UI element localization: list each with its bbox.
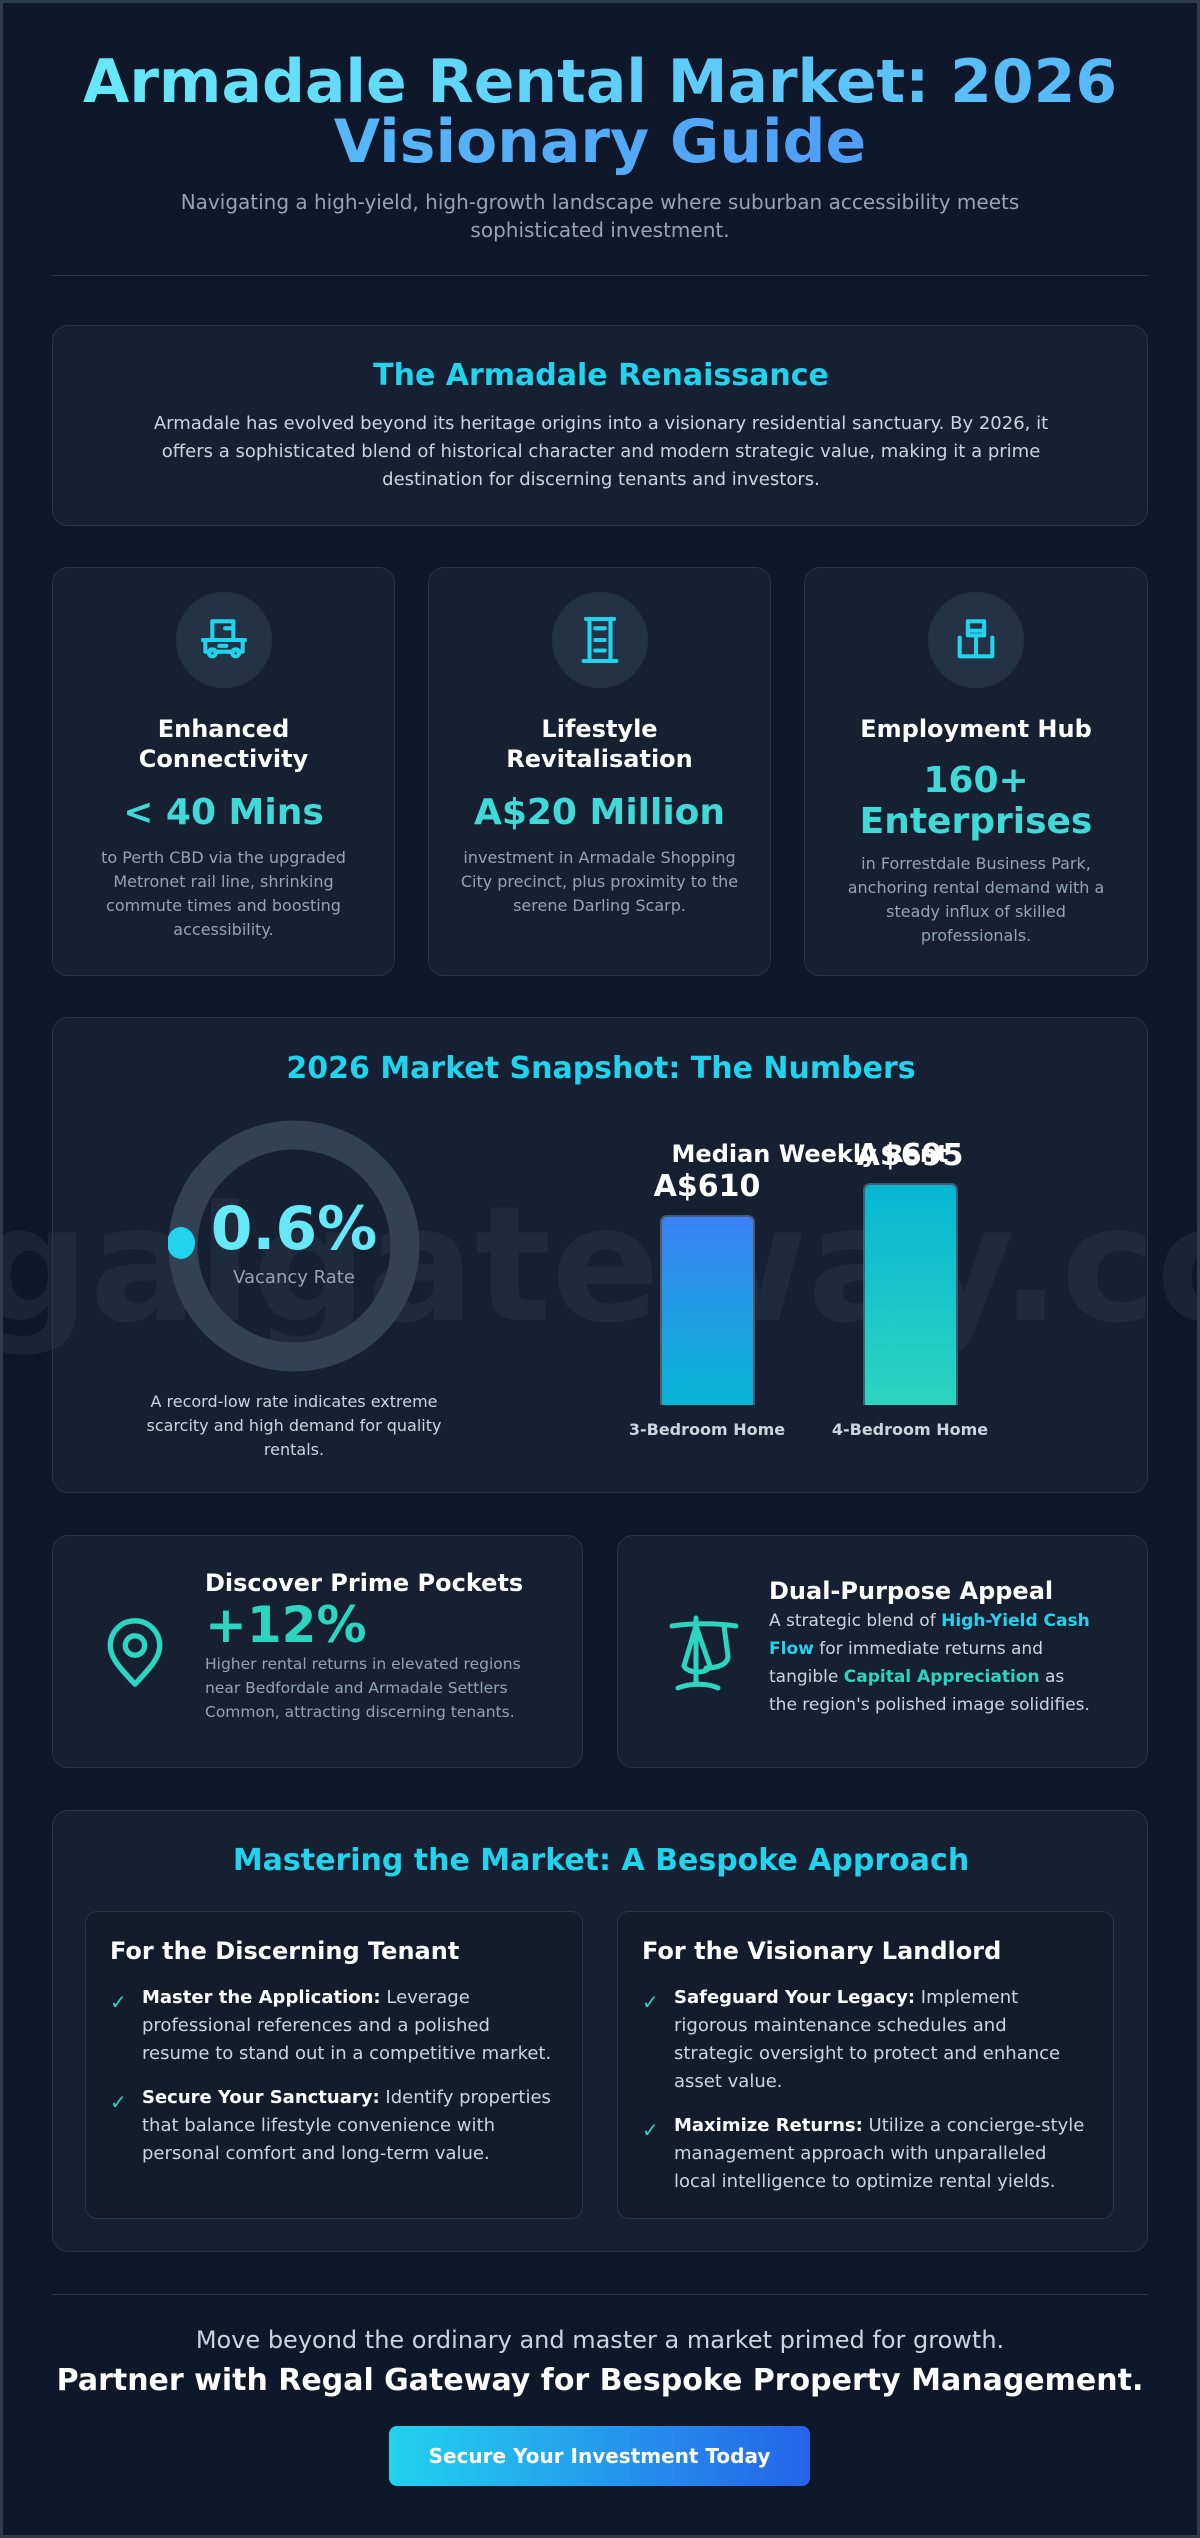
text: prime pockets: Discover Prime Pockets bbox=[205, 1569, 523, 1597]
icon: map pin bbox=[108, 1618, 162, 1687]
item: legacy bbox=[642, 1987, 1060, 2092]
icon: building bbox=[552, 592, 648, 688]
item: sanctuary: that balance lifestyle convenience with bbox=[142, 2115, 495, 2136]
text: prime pockets: Higher rental returns in elevated regions bbox=[205, 1655, 521, 1673]
heading: tenant: For the Discerning Tenant bbox=[110, 1937, 459, 1965]
value: vacancy: 0.6% bbox=[211, 1194, 377, 1264]
text: employment: 160+ bbox=[923, 760, 1029, 801]
donut chart: vacancy bbox=[168, 1120, 420, 1372]
item: returns: local intelligence to optimize rental yields. bbox=[674, 2171, 1055, 2192]
text: dual purpose bbox=[769, 1577, 1090, 1715]
text: prime pockets: near Bedfordale and Armadale Settlers bbox=[205, 1679, 508, 1697]
label: 4-bedroom: 4-Bedroom Home bbox=[832, 1420, 988, 1439]
text: dual purpose: the region's polished image solidifies. bbox=[769, 1695, 1090, 1715]
text: dual purpose: Flow for immediate returns and bbox=[769, 1639, 1043, 1659]
card: dual purpose bbox=[617, 1535, 1148, 1768]
heading: landlord: For the Visionary Landlord bbox=[642, 1937, 1001, 1965]
item: sanctuary: ✓ bbox=[110, 2090, 127, 2114]
item: application: professional references and a polished bbox=[142, 2015, 490, 2036]
item: sanctuary: personal comfort and long-term value. bbox=[142, 2143, 490, 2164]
item: returns: management approach with unparalleled bbox=[674, 2143, 1046, 2164]
item: sanctuary: Secure Your Sanctuary: Identify properties bbox=[142, 2087, 551, 2108]
text: employment: Enterprises bbox=[860, 801, 1092, 842]
text: prime pockets: Common, attracting discerning tenants. bbox=[205, 1703, 515, 1721]
bar: 3-bedroom bbox=[660, 1215, 755, 1405]
heading: snapshot: 2026 Market Snapshot: The Numbers bbox=[286, 1051, 916, 1086]
title: Armadale Rental Market: 2026 bbox=[83, 47, 1117, 117]
bar chart: median weekly rent bbox=[629, 1138, 988, 1439]
icon: chair bbox=[928, 592, 1024, 688]
item: sanctuary bbox=[110, 2087, 551, 2164]
item: returns bbox=[642, 2115, 1084, 2192]
text: connectivity bbox=[101, 715, 346, 939]
item: application: Master the Application: Leverage bbox=[142, 1987, 470, 2008]
label: vacancy: Vacancy Rate bbox=[233, 1267, 355, 1288]
panel: mastering the market bbox=[52, 1810, 1148, 2252]
text: renaissance: Armadale has evolved beyond its heritage origins into a visionary residential sanctuary. By 2026, it offers a sophisticated blend of historical character and modern strategic value, making it a prime destination for discerning tenants and investors. bbox=[154, 413, 1048, 490]
text: employment: in Forrestdale Business Park, anchoring rental demand with a steady influx of skilled professionals. bbox=[848, 854, 1104, 945]
icon: balance bbox=[670, 1616, 738, 1690]
item: returns: Maximize Returns: Utilize a concierge-style bbox=[674, 2115, 1084, 2136]
heading: renaissance: The Armadale Renaissance bbox=[373, 358, 829, 393]
card: lifestyle bbox=[428, 567, 771, 976]
text: lifestyle: investment in Armadale Shopping City precinct, plus proximity to the serene Darling Scarp. bbox=[461, 848, 738, 915]
card: prime pockets bbox=[52, 1535, 583, 1768]
item: legacy: ✓ bbox=[642, 1990, 659, 2014]
item: legacy: Safeguard Your Legacy: Implement bbox=[674, 1987, 1018, 2008]
item: application bbox=[110, 1987, 551, 2064]
value: 4-bedroom: A$695 bbox=[857, 1138, 963, 1173]
text: dual purpose: Dual-Purpose Appeal bbox=[769, 1577, 1053, 1605]
caption: vacancy: A record-low rate indicates extreme scarcity and high demand for quality rentals. bbox=[146, 1392, 441, 1459]
text: connectivity: to Perth CBD via the upgraded Metronet rail line, shrinking commute times and boosting accessibility. bbox=[101, 848, 346, 939]
chart title: Median Weekly Rent bbox=[672, 1140, 948, 1168]
text: employment bbox=[848, 715, 1104, 945]
cta button: Secure Your Investment Today bbox=[429, 2444, 770, 2468]
item: returns: ✓ bbox=[642, 2118, 659, 2142]
subpanel: tenant bbox=[85, 1911, 583, 2219]
icon: car bbox=[176, 592, 272, 688]
item: legacy: strategic oversight to protect and enhance bbox=[674, 2043, 1060, 2064]
item: application: resume to stand out in a competitive market. bbox=[142, 2043, 551, 2064]
heading: mastering: Mastering the Market: A Bespoke Approach bbox=[233, 1843, 969, 1878]
card: employment bbox=[804, 567, 1148, 976]
item: legacy: rigorous maintenance schedules and bbox=[674, 2015, 1007, 2036]
text: lifestyle bbox=[461, 715, 738, 915]
cta text: Partner with Regal Gateway for Bespoke Property Management. bbox=[57, 2363, 1143, 2398]
text: dual purpose: A strategic blend of High-Yield Cash bbox=[769, 1611, 1090, 1631]
label: 3-bedroom: 3-Bedroom Home bbox=[629, 1420, 785, 1439]
cta text: Move beyond the ordinary and master a market primed for growth. bbox=[196, 2326, 1004, 2354]
panel: market snapshot bbox=[52, 1017, 1148, 1493]
text: prime pockets bbox=[205, 1569, 523, 1721]
text: lifestyle: Revitalisation bbox=[506, 745, 693, 773]
cta button bbox=[389, 2426, 810, 2486]
value: 3-bedroom: A$610 bbox=[654, 1169, 760, 1204]
cta text bbox=[57, 2326, 1143, 2398]
text: connectivity: < 40 Mins bbox=[123, 792, 324, 833]
subpanel: landlord bbox=[617, 1911, 1114, 2219]
panel: renaissance bbox=[52, 325, 1148, 526]
text: connectivity: Enhanced bbox=[158, 715, 289, 743]
text: employment: Employment Hub bbox=[860, 715, 1092, 743]
card: connectivity bbox=[52, 567, 395, 976]
text: dual purpose: tangible Capital Appreciation as bbox=[769, 1667, 1064, 1687]
text: connectivity: Connectivity bbox=[139, 745, 308, 773]
item: application: ✓ bbox=[110, 1990, 127, 2014]
text: lifestyle: A$20 Million bbox=[474, 792, 725, 833]
item: legacy: asset value. bbox=[674, 2071, 783, 2092]
bar: 4-bedroom bbox=[863, 1183, 958, 1405]
title bbox=[83, 47, 1117, 177]
text: lifestyle: Lifestyle bbox=[541, 715, 658, 743]
text: prime pockets: +12% bbox=[205, 1596, 367, 1654]
subtitle: Navigating a high-yield, high-growth landscape where suburban accessibility meets sophisticated investment. bbox=[181, 190, 1019, 242]
title: Visionary Guide bbox=[334, 107, 866, 177]
